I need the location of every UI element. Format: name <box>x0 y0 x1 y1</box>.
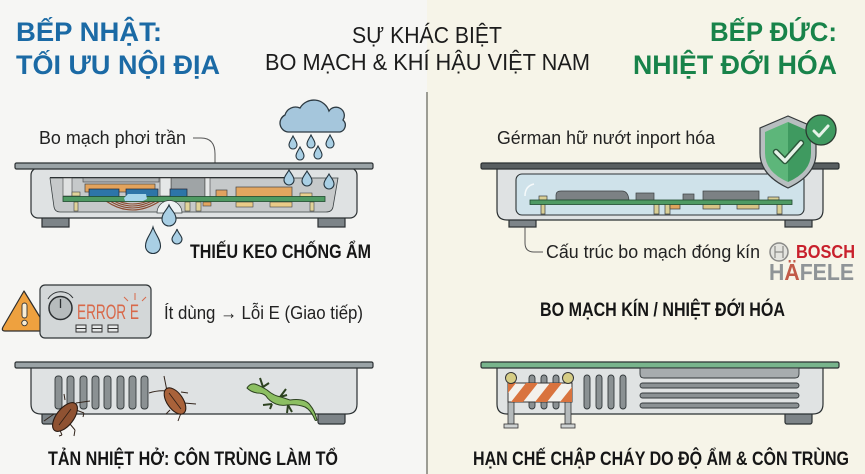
heading: German stove <box>633 16 837 80</box>
label: exposed board: Bo mạch phơi trần <box>39 127 186 148</box>
water leak <box>157 200 182 213</box>
icon: shield <box>760 115 836 188</box>
caption: sealed board tropicalized: BO MẠCH KÍN / NHIỆT ĐỚI HÓA <box>540 299 785 321</box>
label: exposed board <box>39 127 215 163</box>
label: German text: Gérman hữ nướt inport hóa <box>497 127 716 148</box>
icon: barrier <box>504 372 575 428</box>
diagram: vented stove with insects <box>15 362 373 436</box>
glass top <box>481 163 839 169</box>
heading: German stove: BẾP ĐỨC: <box>710 16 837 47</box>
label: rarely used error: Ít dùng → Lỗi E (Giao tiếp) <box>164 302 363 323</box>
heading: center title: SỰ KHÁC BIỆT <box>352 22 502 48</box>
background: left panel <box>0 0 427 474</box>
heading: Japanese stove: BẾP NHẬT: <box>16 16 162 47</box>
logo: Bosch: BOSCH <box>796 242 855 262</box>
heading: German stove: NHIỆT ĐỚI HÓA <box>633 49 837 80</box>
background: right panel <box>427 0 865 474</box>
heading: Japanese stove: TỐI ƯU NỘI ĐỊA <box>16 48 220 80</box>
heading: center title <box>265 22 590 75</box>
diagram: sealed stove cross-section <box>481 163 839 227</box>
heading: Japanese stove <box>16 16 220 80</box>
label: sealed structure <box>525 227 760 262</box>
icon: warning triangle <box>2 291 47 331</box>
glass top <box>15 163 373 169</box>
icon: rain cloud <box>280 100 345 160</box>
heading: center title: BO MẠCH & KHÍ HẬU VIỆT NAM <box>265 49 590 75</box>
vents <box>529 368 799 409</box>
diagram: exposed stove cross-section <box>15 163 373 227</box>
coil <box>106 201 160 210</box>
diagram: protected stove with barrier <box>481 362 839 428</box>
condensation drops <box>284 170 334 189</box>
panel: error display <box>40 285 151 338</box>
icon: gecko <box>247 378 317 420</box>
label: sealed structure: Cấu trúc bo mạch đóng kín <box>546 241 760 262</box>
logo: Hafele: HÄFELE <box>769 259 854 285</box>
caption: missing moisture glue: THIẾU KEO CHỐNG ẨM <box>190 241 371 263</box>
logo: Bosch <box>770 242 855 262</box>
vents <box>55 376 148 409</box>
icon: falling drops <box>146 227 182 254</box>
caption: open vents insects nest: TẢN NHIỆT HỞ: CÔN TRÙNG LÀM TỔ <box>48 448 338 470</box>
icon: cockroach <box>44 394 90 436</box>
sealed board components <box>539 191 782 214</box>
panel: error display: ERROR E <box>77 301 139 324</box>
components <box>83 178 159 182</box>
icon: cockroach <box>149 376 196 421</box>
